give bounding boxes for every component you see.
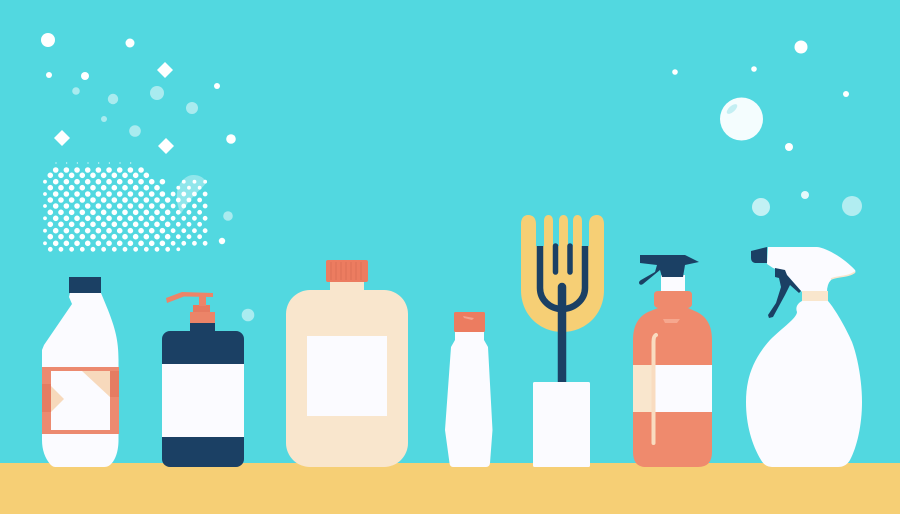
halftone dot panel [45,163,207,249]
bottle: large white spray [746,247,862,467]
right bubbles [672,40,862,216]
left sparkles and bubbles [41,33,254,321]
brush in holder [521,215,604,467]
bottle: small white tube [445,312,492,467]
bottle: cream jug with orange cap [286,260,408,467]
bottle: navy pump dispenser [162,292,244,467]
bottle: coral spray [633,255,712,467]
bottle: white jug with coral label [42,277,119,467]
shelf [0,463,900,514]
translucent bubble over halftone [177,175,206,214]
